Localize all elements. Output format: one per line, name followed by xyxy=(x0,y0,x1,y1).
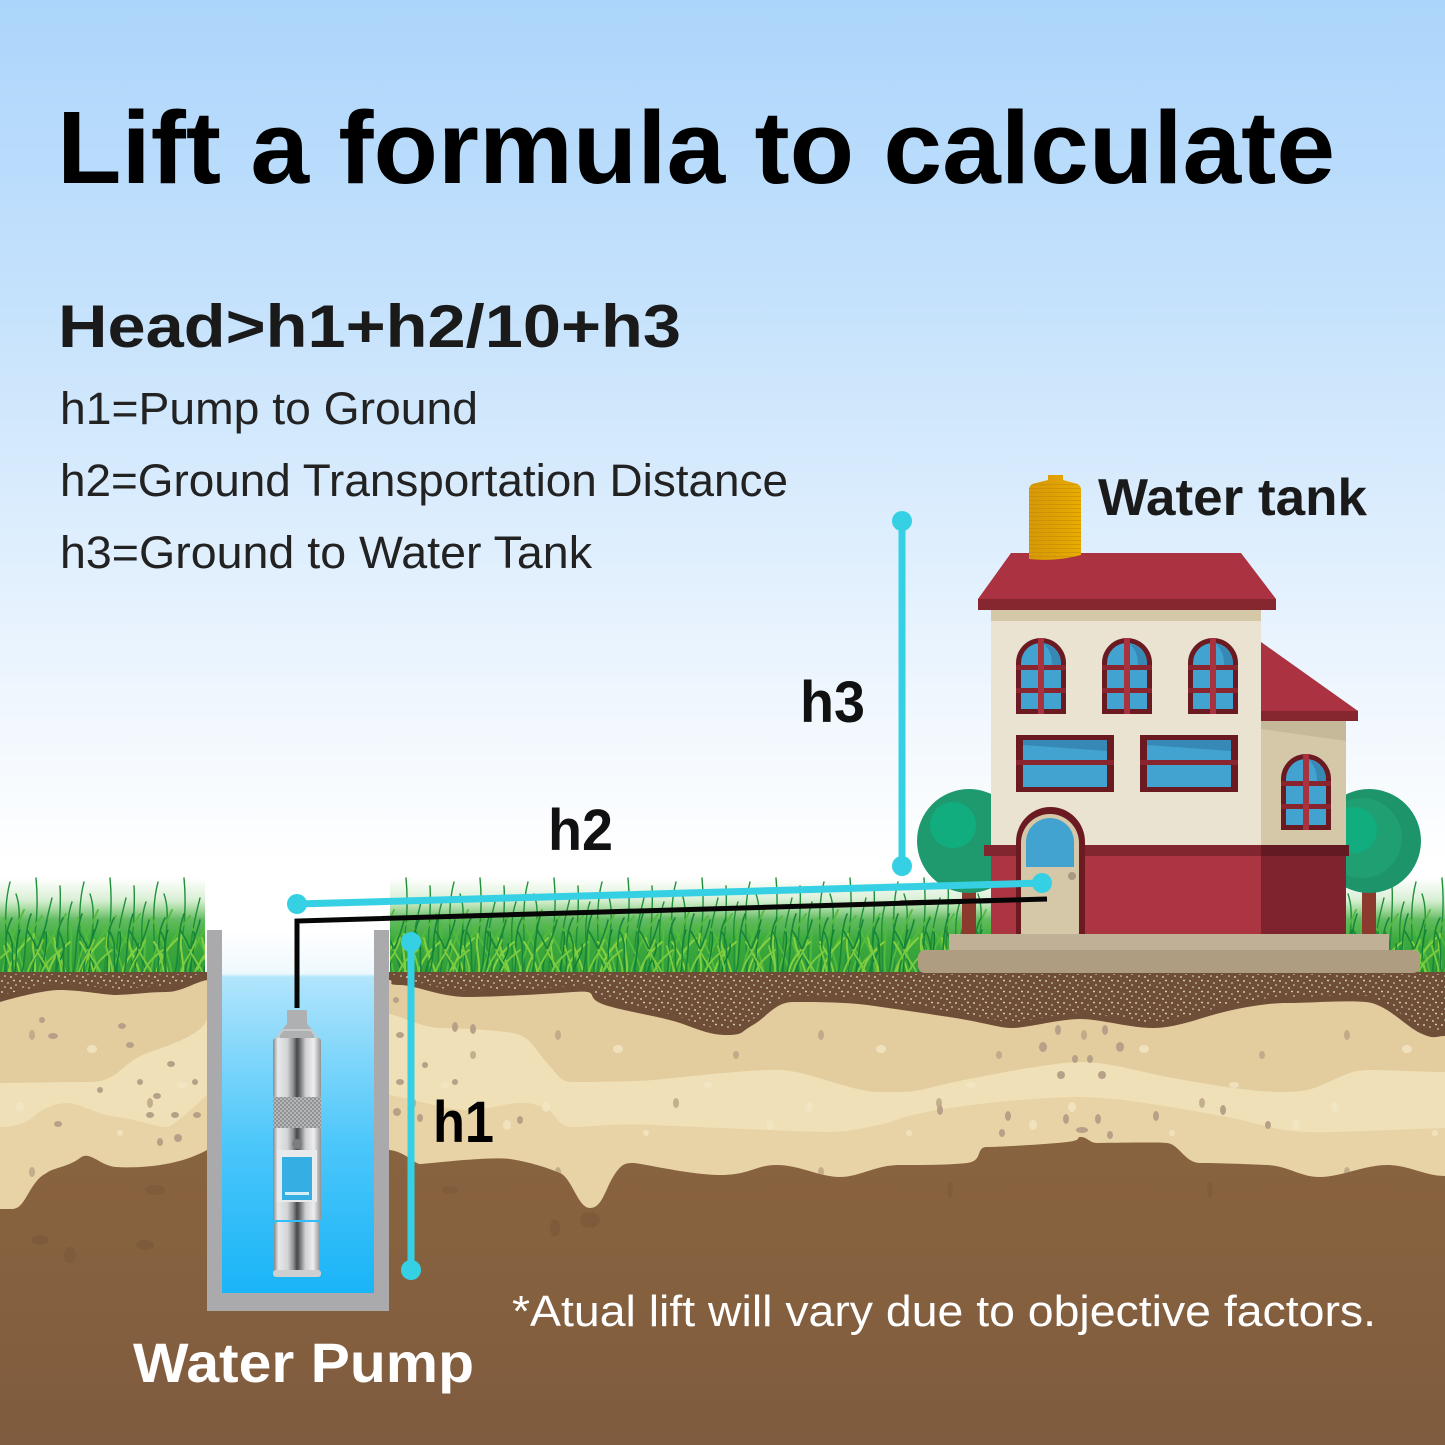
h1 marker line xyxy=(401,932,421,1280)
water tank xyxy=(1029,475,1081,560)
water pump xyxy=(273,899,1047,1277)
background sky xyxy=(0,0,1445,865)
label: h3: h3 xyxy=(800,670,865,735)
definition h2: h2=Ground Transportation Distance xyxy=(60,455,788,506)
grass: left of the well xyxy=(0,872,205,976)
annex window xyxy=(1281,754,1331,830)
house xyxy=(918,475,1420,973)
pump upper body xyxy=(273,1038,321,1098)
pump head xyxy=(280,1010,314,1040)
pebbles in the sand xyxy=(0,1010,1445,1209)
label backing xyxy=(277,1150,317,1202)
middle windows xyxy=(1016,735,1114,792)
label: water pump: Water Pump xyxy=(133,1331,474,1394)
ground floor wall xyxy=(991,856,1261,934)
label: h2: h2 xyxy=(548,798,613,863)
pump coupling bolt xyxy=(292,1139,302,1149)
well walls xyxy=(207,930,389,1311)
topsoil xyxy=(0,972,1445,1037)
platform xyxy=(949,934,1389,952)
water column xyxy=(222,930,374,1293)
title: Lift a formula to calculate xyxy=(57,90,1335,205)
main wall xyxy=(991,610,1261,846)
main roof xyxy=(978,553,1276,599)
mesh intake xyxy=(273,1097,321,1129)
lower sand layer xyxy=(0,972,1445,1209)
pump lower body xyxy=(274,1222,320,1274)
dark soil smudges xyxy=(31,1182,1213,1263)
annex roof xyxy=(1261,642,1358,721)
label: water tank: Water tank xyxy=(1098,469,1367,527)
ground cross-section xyxy=(0,972,1445,1445)
label: h1: h1 xyxy=(433,1090,494,1155)
pump bracket xyxy=(275,1030,319,1040)
cable over the h2 line at the door xyxy=(900,899,1047,903)
definition h3: h3=Ground to Water Tank xyxy=(60,527,593,578)
pump cable xyxy=(297,899,1047,1008)
label stripe xyxy=(285,1192,309,1195)
grass: right of the well xyxy=(390,872,1445,976)
floor band xyxy=(984,845,1261,856)
pump label xyxy=(282,1157,312,1200)
grey pebbles beside the well and around the centre xyxy=(39,997,1271,1146)
pump middle body xyxy=(273,1128,321,1220)
h3 marker line xyxy=(892,511,912,876)
well shaft with water xyxy=(207,930,389,1311)
pump foot ring xyxy=(273,1270,321,1277)
annex wall xyxy=(1261,721,1346,846)
door xyxy=(1016,807,1085,934)
upper windows xyxy=(1016,638,1066,714)
trees xyxy=(917,789,1421,935)
formula: Head>h1+h2/10+h3 xyxy=(58,293,681,360)
definition h1: h1=Pump to Ground xyxy=(60,383,478,434)
light sand band xyxy=(0,1014,1445,1132)
deep soil xyxy=(0,972,1445,1445)
h2 marker line xyxy=(287,873,1052,914)
horizon haze xyxy=(0,865,1445,980)
topsoil speckles xyxy=(0,974,1445,1031)
upper sand layer xyxy=(0,972,1445,1092)
footnote: *Atual lift will vary due to objective factors. xyxy=(512,1287,1376,1336)
